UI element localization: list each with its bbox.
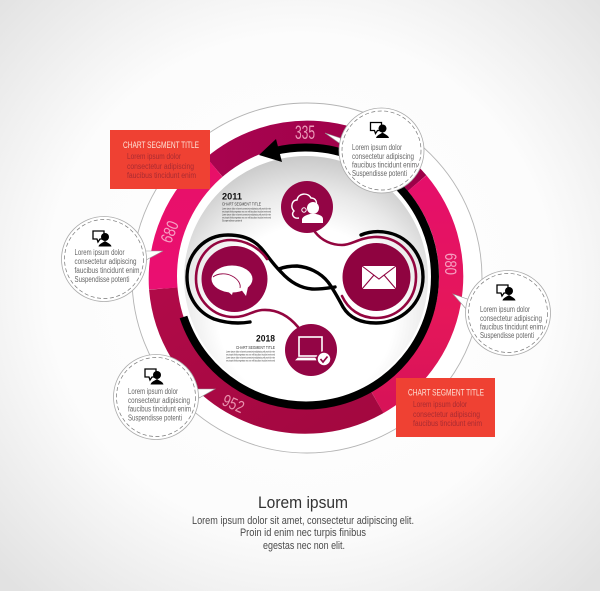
ring chart [164, 136, 448, 419]
speech bubble: bottom left: Suspendisse potenti [128, 414, 182, 422]
callout: red box top: Lorem ipsum dolor [127, 152, 181, 161]
text block: 2011: nec turpis finibus egestas nec non elit faucibus tincidunt enim sed [222, 210, 271, 214]
speech bubble: bottom left: consectetur adipiscing [128, 396, 190, 405]
speech bubble: left: Lorem ipsum dolor [74, 248, 125, 257]
callout: red box bottom: Lorem ipsum dolor [413, 400, 467, 409]
speech bubble: top right: Suspendisse potenti [352, 169, 407, 178]
callout: red box bottom: consectetur adipiscing [413, 410, 480, 419]
callout: red box top: consectetur adipiscing [127, 162, 194, 171]
text block: 2018: 2018 [256, 334, 275, 344]
segment value 952: 952 [219, 391, 247, 417]
connector maroon curves [196, 232, 416, 327]
speech bubble: top right: consectetur adipiscing [352, 152, 414, 161]
text block: 2011: Lorem ipsum dolor sit amet consectetur adipiscing elit proin id enim [222, 214, 271, 216]
text block: 2011: CHART SEGMENT TITLE [222, 202, 261, 206]
text block: 2011 [222, 192, 271, 222]
text block: 2018: Lorem ipsum dolor sit amet consectetur adipiscing elit proin id enim [226, 356, 275, 360]
speech bubble: left: Suspendisse potenti [74, 275, 130, 284]
bottom text: Proin id enim nec turpis finibus [240, 527, 366, 539]
black arc with arrow [184, 139, 435, 406]
text block: 2018 [226, 334, 275, 362]
speech bubble: bottom left [114, 354, 215, 440]
text block: 2018: CHART SEGMENT TITLE [236, 345, 275, 350]
connector black curves [187, 232, 423, 323]
speech bubble: top right: Lorem ipsum dolor [352, 143, 402, 152]
speech bubble: right: faucibus tincidunt enim [480, 322, 543, 332]
callout: red box bottom [396, 378, 495, 437]
text block: 2018: nec turpis finibus egestas nec non elit faucibus tincidunt enim sed [226, 354, 275, 356]
central shaded disc [184, 156, 428, 400]
segment: right [376, 185, 448, 400]
text block: 2018: nec turpis finibus egestas nec non elit faucibus tincidunt enim sed [226, 360, 275, 362]
icon: cloud support [281, 181, 333, 233]
speech bubble: bottom left: Lorem ipsum dolor [128, 387, 178, 396]
speech bubble: top right [325, 108, 424, 193]
outer thin ring [132, 103, 482, 453]
bottom text: Lorem ipsum dolor sit amet, consectetur adipiscing elit. [192, 515, 414, 527]
segment value right 680: 680 [441, 253, 460, 275]
callout: red box top [110, 130, 210, 189]
text block: 2011: Suspendisse potenti [222, 220, 242, 222]
speech bubble: top right: faucibus tincidunt enim [352, 160, 417, 170]
speech bubble: left [62, 216, 163, 302]
central white disc [177, 145, 439, 407]
segment value left 680: 680 [157, 218, 183, 246]
speech bubble: left: consectetur adipiscing [74, 257, 136, 266]
icon: chat [202, 246, 268, 312]
icon: envelope [342, 243, 410, 311]
icon: laptop [285, 324, 337, 376]
speech bubble: left: faucibus tincidunt enim [74, 266, 140, 275]
speech bubble: right: Lorem ipsum dolor [480, 305, 530, 314]
speech bubble: bottom left: faucibus tincidunt enim [128, 404, 191, 414]
speech bubble: right [453, 270, 550, 356]
callout: red box bottom: faucibus tincidunt enim [413, 419, 482, 428]
segment: left [164, 169, 216, 288]
bottom text [192, 515, 414, 552]
text block: 2011: Lorem ipsum dolor sit amet consectetur adipiscing elit proin id enim [222, 208, 271, 210]
text block: 2011: nec turpis finibus egestas nec non elit faucibus tincidunt enim sed [222, 216, 271, 220]
callout: red box bottom: CHART SEGMENT TITLE [408, 388, 484, 398]
speech bubble: right: Suspendisse potenti [480, 331, 534, 340]
bottom title: Lorem ipsum [258, 493, 348, 512]
speech bubble: right: consectetur adipiscing [480, 314, 542, 323]
segment value 335: 335 [295, 123, 315, 144]
text block: 2018: Lorem ipsum dolor sit amet consectetur adipiscing elit proin id enim [226, 350, 275, 354]
segment: top [216, 136, 415, 185]
segment: bottom [164, 288, 376, 419]
text block: 2011: 2011 [222, 192, 243, 202]
callout: red box top: faucibus tincidunt enim [127, 171, 196, 180]
callout: red box top: CHART SEGMENT TITLE [123, 140, 199, 151]
bottom text: egestas nec non elit. [263, 540, 345, 552]
